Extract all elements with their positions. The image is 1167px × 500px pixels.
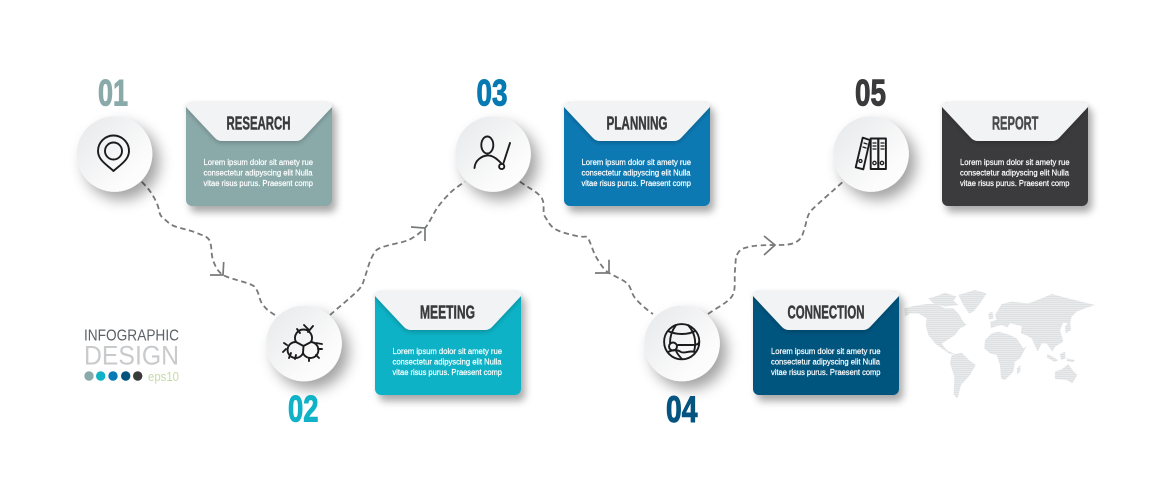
body text: Lorem ipsum dolor sit amety rue	[204, 157, 313, 167]
logo eps label: eps10	[148, 369, 179, 384]
heading tab	[942, 102, 1088, 141]
card body	[186, 102, 332, 206]
heading tab	[375, 291, 521, 330]
heading: RESEARCH	[226, 114, 290, 134]
step 02	[266, 306, 342, 430]
dashed path 4 to 5	[708, 182, 843, 314]
body text	[392, 346, 502, 377]
logo title: INFOGRAPHIC	[84, 328, 179, 344]
logo colour dots	[84, 371, 142, 381]
circle 3	[455, 116, 531, 192]
logo: infographic design	[84, 328, 179, 384]
body text: consectetur adipyscing elit Nulla	[204, 168, 313, 178]
icon: joined hands	[283, 325, 322, 361]
body text: vitae risus purus. Praesent comp	[960, 178, 1070, 188]
body text	[960, 157, 1070, 188]
icon: globe	[664, 324, 699, 359]
panel: planning	[564, 102, 710, 206]
heading tab	[753, 291, 899, 330]
body text: Lorem ipsum dolor sit amety rue	[582, 157, 691, 167]
body text: consectetur adipyscing elit Nulla	[960, 168, 1069, 178]
heading: MEETING	[420, 302, 475, 322]
panel: report	[942, 102, 1088, 206]
body text	[204, 157, 313, 188]
heading: PLANNING	[606, 114, 668, 134]
world map	[904, 290, 1095, 398]
step 05	[833, 72, 909, 192]
icon: map pin	[98, 135, 129, 171]
number 01: 01	[98, 72, 128, 114]
panel: meeting	[375, 291, 521, 395]
body text: consectetur adipyscing elit Nulla	[392, 356, 502, 366]
step 04	[644, 306, 720, 430]
step 01	[77, 72, 152, 192]
icon: binders	[856, 138, 886, 169]
circle 1	[77, 116, 152, 192]
body text: Lorem ipsum dolor sit amety rue	[771, 346, 881, 356]
card body	[753, 291, 899, 395]
body text: vitae risus purus. Praesent comp	[204, 178, 313, 188]
body text: consectetur adipyscing elit Nulla	[771, 356, 880, 366]
heading: CONNECTION	[788, 302, 864, 322]
number 03: 03	[476, 72, 508, 114]
card body	[375, 291, 521, 395]
circle 5	[833, 116, 909, 192]
body text: vitae risus purus. Praesent comp	[582, 178, 691, 188]
dashed path 3 to 4	[520, 182, 653, 314]
body text: consectetur adipyscing elit Nulla	[582, 168, 691, 178]
body text: vitae risus purus. Praesent comp	[392, 367, 502, 377]
number 02: 02	[288, 388, 318, 430]
body text: Lorem ipsum dolor sit amety rue	[392, 346, 502, 356]
heading tab	[564, 102, 710, 141]
body text: Lorem ipsum dolor sit amety rue	[960, 157, 1070, 167]
body text: vitae risus purus. Praesent comp	[771, 367, 881, 377]
body text	[771, 346, 881, 377]
card body	[942, 102, 1088, 206]
logo subtitle: DESIGN	[84, 340, 179, 370]
panel: connection	[753, 291, 899, 395]
body text	[582, 157, 691, 188]
heading: REPORT	[992, 114, 1038, 134]
step 03	[455, 72, 531, 192]
panel: research	[186, 102, 332, 206]
heading tab	[186, 102, 332, 141]
card body	[564, 102, 710, 206]
dashed path 2 to 3	[330, 182, 465, 315]
number 04: 04	[666, 389, 698, 430]
number 05: 05	[855, 72, 886, 114]
dashed path 1 to 2	[142, 182, 275, 315]
circle 4	[644, 306, 720, 381]
icon: person with pointer	[474, 136, 510, 169]
circle 2	[266, 306, 342, 381]
